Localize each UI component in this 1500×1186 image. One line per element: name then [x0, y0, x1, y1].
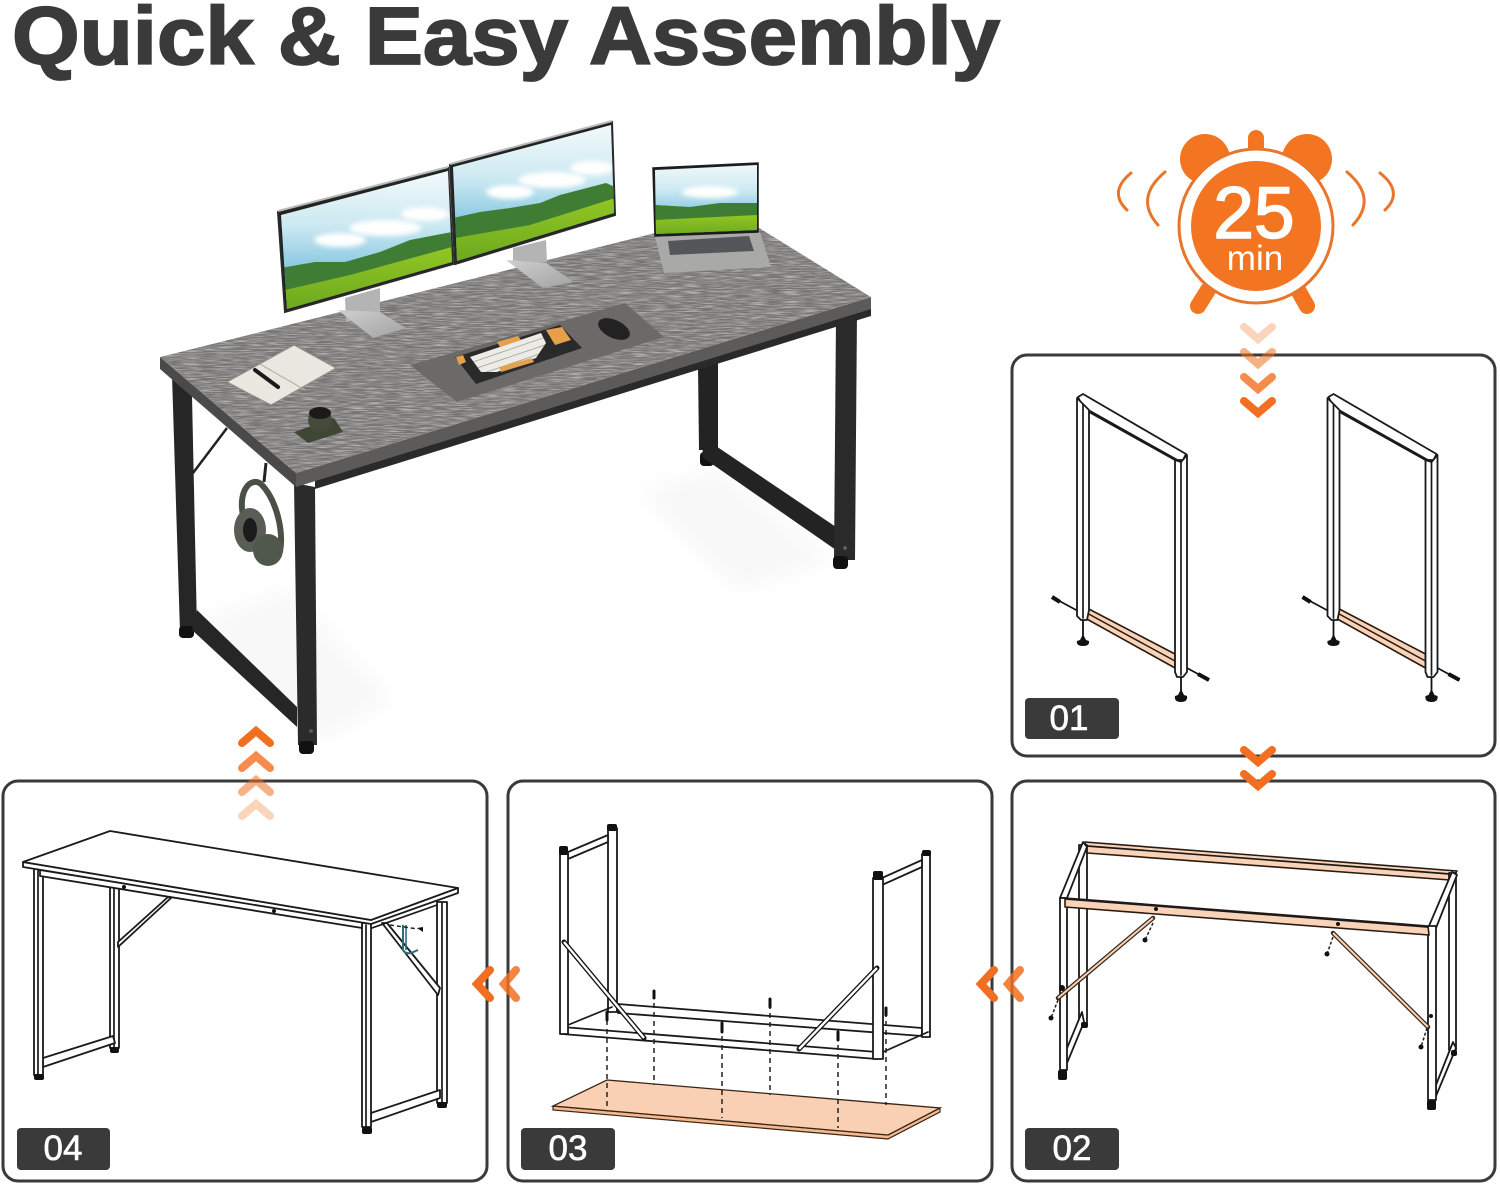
ringing arcs [1118, 172, 1393, 225]
monitor right [448, 120, 618, 266]
left end frame [1058, 842, 1088, 1080]
clock bells and feet [1180, 130, 1332, 306]
brace screws [1048, 907, 1433, 1050]
headphone hook [390, 925, 423, 953]
step badge 01 [1025, 698, 1119, 739]
apron [40, 870, 362, 928]
mouse [595, 314, 633, 344]
step badge 01: 01 [1050, 699, 1088, 738]
desk mat [410, 303, 664, 402]
desk front leg [294, 483, 317, 754]
arrow: step 04 up to finished desk [242, 731, 270, 816]
notebook and pen [227, 345, 336, 405]
frame top bar [1078, 394, 1186, 462]
monitor stand right [506, 240, 574, 288]
mechanical keyboard [455, 325, 582, 384]
coffee cup and saucer [294, 407, 343, 443]
step badge 03: 03 [549, 1129, 587, 1168]
diagonal braces [564, 942, 877, 1049]
arrow: step 02 left to step 03 [981, 970, 1020, 998]
floor shadow [200, 470, 830, 740]
monitor stand left [338, 288, 406, 338]
desktop board [553, 1080, 940, 1139]
diagonal braces [1058, 918, 1428, 1027]
panel: step 03 [508, 781, 992, 1181]
diagonal braces [118, 897, 440, 995]
inverted frame front [560, 852, 883, 1059]
clock number: 25 [1213, 173, 1295, 254]
panel: step 02 [1012, 781, 1495, 1181]
orange bottom bar [1085, 607, 1175, 668]
upturned feet [559, 824, 931, 880]
headphone hook [264, 463, 266, 482]
laptop [650, 160, 771, 273]
step badge 04 [17, 1128, 110, 1170]
arrow: step 01 down to step 02 [1244, 750, 1272, 786]
timer icon: 25 min alarm clock [1118, 130, 1393, 306]
desk top wood surface [160, 228, 871, 473]
tabletop [23, 831, 458, 924]
inverted frame rear [568, 828, 930, 1052]
right end frame [1302, 394, 1460, 702]
screws [1052, 597, 1209, 680]
lower side bars [43, 1036, 440, 1122]
desk right front leg [833, 311, 857, 569]
bolts [122, 885, 276, 913]
step badge 04: 04 [44, 1129, 82, 1168]
monitor left [275, 165, 455, 315]
rear legs [110, 887, 447, 1108]
clock unit: min [1227, 239, 1283, 278]
step badge 02 [1025, 1128, 1119, 1170]
front legs [34, 868, 372, 1134]
panel: step 01 [1012, 355, 1495, 756]
screws [607, 991, 886, 1040]
right end frame [1427, 872, 1457, 1110]
clock face [1179, 149, 1333, 303]
product photo: computer desk [150, 120, 880, 754]
headphones [234, 482, 283, 566]
desk rear legs [698, 360, 836, 550]
desk underside brace [193, 428, 227, 473]
front rail [1065, 898, 1429, 935]
arrow: step 03 left to step 04 [477, 970, 516, 998]
side rail [372, 905, 437, 928]
step badge 03 [521, 1128, 615, 1170]
desk apron [315, 306, 871, 489]
rear rail [1085, 842, 1457, 880]
left end frame [1052, 394, 1209, 702]
desk edge [160, 297, 871, 487]
leveling feet [1077, 620, 1187, 702]
clock disc [1191, 161, 1321, 291]
panel: step 04 [3, 781, 487, 1181]
desk left rear leg [172, 375, 297, 727]
arrow: clock down to step 01 [1244, 327, 1272, 413]
frame posts [1077, 398, 1187, 677]
step badge 02: 02 [1053, 1129, 1091, 1168]
dashed screw guides [607, 994, 886, 1128]
